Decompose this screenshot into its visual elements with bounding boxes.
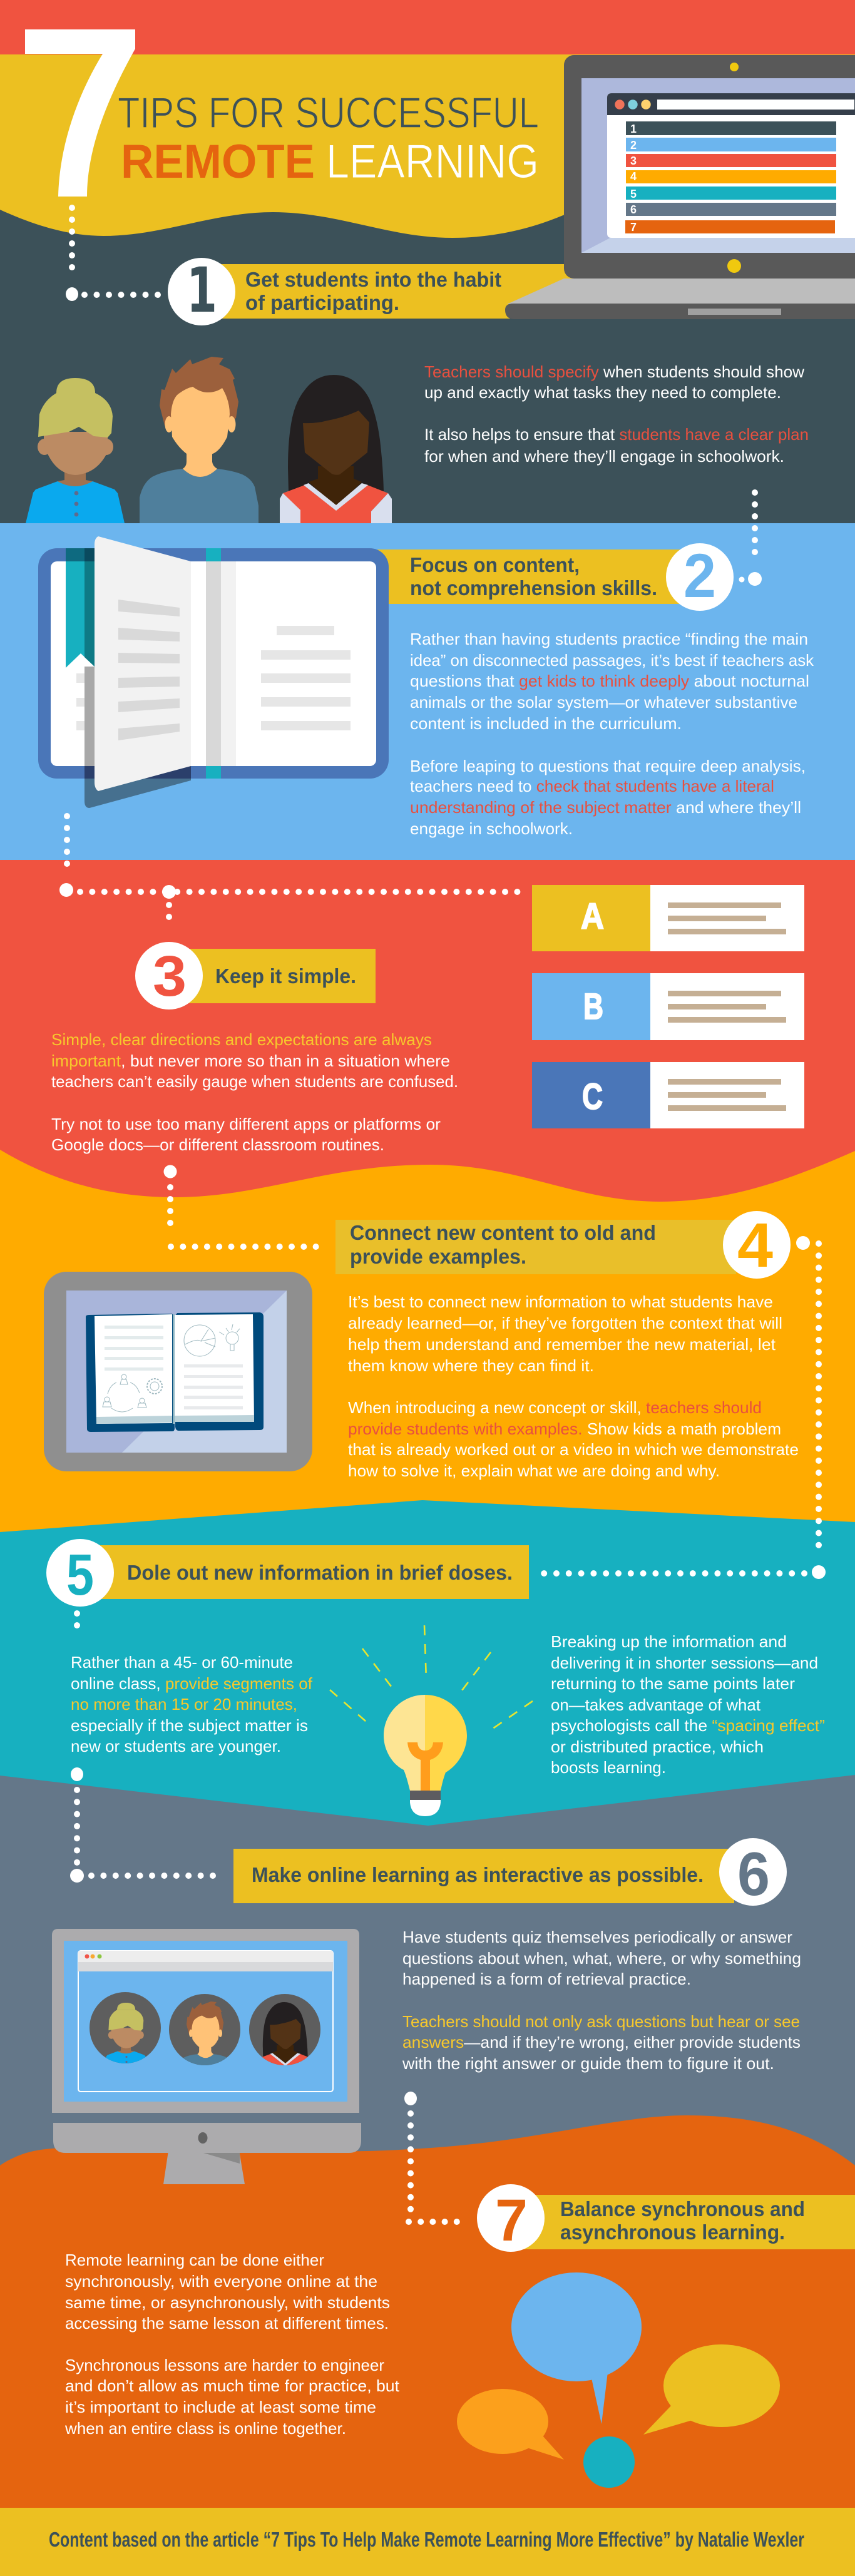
tip 2 body text: Rather than having students practice “finding the main [410,630,808,648]
tip 6 body text [402,1928,801,2073]
tip 1 body text: up and exactly what tasks they need to complete. [424,383,781,402]
avatar 1 [90,1992,161,2071]
tip 1 number badge: 1 [187,255,217,327]
icon: light bulb [330,1625,533,1816]
tip 4 body text: provide students with examples. Show kids a math problem [348,1419,781,1438]
tip 5 number badge [46,1539,114,1607]
tip 3 body text: important, but never more so than in a situation where [51,1051,450,1070]
tip 2 body text: content is included in the curriculum. [410,714,682,733]
tip 4 body text: It’s best to connect new information to what students have [348,1292,773,1311]
dotted connector: tip 3 to tip 4 [164,1165,327,1247]
tip 4 body text: how to solve it, explain what we are doing and why. [348,1461,720,1480]
tip 4 number badge: 4 [737,1210,773,1280]
tip 1 body text [424,362,809,466]
tip 7 body text: Synchronous lessons are harder to engineer [65,2356,384,2374]
tip 5 left body text: Rather than a 45- or 60-minute [71,1653,293,1672]
icon: laptop: 6 [630,203,637,216]
icon: open book [38,536,389,808]
tip 7 body text: Remote learning can be done either [65,2251,324,2269]
tip 6 body text: answers—and if they’re wrong, either provide students [402,2033,801,2052]
tip 5 right body text: returning to the same points later [551,1674,795,1693]
card C [532,1062,804,1128]
card C: C [582,1076,603,1117]
tip 7 heading: Balance synchronous and [560,2197,805,2221]
tip 6 body text: questions about when, what, where, or why something [402,1949,801,1968]
tip 7 body text: it’s important to include at least some time [65,2398,376,2416]
tip 7 body text: same time, or asynchronously, with students [65,2293,390,2312]
tip 4 number badge [723,1210,791,1280]
tip 7 heading: asynchronous learning. [560,2221,785,2244]
tip 5 number badge: 5 [66,1542,94,1607]
tip 6 body text: Have students quiz themselves periodically or answer [402,1928,792,1946]
browser window [78,1951,333,2092]
title: tips for successful: TIPS FOR SUCCESSFUL [118,88,539,137]
tip 6 number badge: 6 [737,1839,770,1908]
tip 2 heading [410,553,657,600]
tip 7 number badge: 7 [495,2187,528,2254]
tip 1 body text: for when and where they’ll engage in schoolwork. [424,447,784,466]
tip 6 body text: happened is a form of retrieval practice. [402,1970,691,1988]
tip 3 body text: teachers can’t easily gauge when students are confused. [51,1072,458,1091]
tip 2 heading: Focus on content, [410,553,580,576]
tip 2 heading: not comprehension skills. [410,576,657,600]
tip 1 body text: Teachers should specify when students should show [424,362,804,381]
tip 4 body text: help them understand and remember the new material, let [348,1335,776,1354]
orange bubble [457,2389,564,2460]
blue bubble [511,2272,642,2424]
tip 7 body text: and don’t allow as much time for practice, but [65,2376,400,2395]
student 1 [26,378,125,523]
card A [532,885,804,951]
dotted connector: tip 6 to tip 7 [404,2092,469,2222]
teal circle [583,2436,635,2488]
icon: laptop: 4 [630,170,637,183]
avatar 2 [169,1994,240,2080]
title: learning: LEARNING [326,135,539,188]
tip 6 banner [233,1849,734,1903]
tip 5 right body text: psychologists call the “spacing effect” [551,1716,825,1735]
dotted connector: tip 2 to tip 3 [59,816,522,929]
icon: laptop: 5 [630,188,637,200]
student 2 [140,357,259,523]
title: big seven [25,29,135,197]
yellow bubble [643,2344,780,2435]
dotted connector: tip 5 to tip 6 [70,1613,225,1883]
tip 3 heading: Keep it simple. [215,964,356,988]
tip 2 number badge [666,541,734,611]
tip 7 heading [560,2197,805,2244]
tip 3 body text: Google docs—or different classroom routines. [51,1135,384,1154]
tip 2 banner [376,549,689,604]
icon: laptop: 2 [630,139,637,151]
card B: B [583,986,603,1027]
tip 5 right body text: boosts learning. [551,1758,666,1777]
tip 7 banner [513,2195,855,2249]
tip 6 body text: Teachers should not only ask questions but hear or see [402,2012,800,2031]
tip 3 body text [51,1030,458,1154]
icon: laptop: 1 [630,123,637,135]
icon: laptop: 7 [630,221,637,233]
panel: multiple choice cards [532,885,804,1128]
title: remote: REMOTE [121,135,315,188]
tip 2 body text: engage in schoolwork. [410,819,573,838]
tip 1 number badge [168,255,235,327]
illustration: three students [26,357,392,523]
tip 5 left body text: especially if the subject matter is [71,1716,308,1735]
tip 4 body text [348,1292,799,1480]
tip 2 body text: animals or the solar system—or whatever substantive [410,693,797,712]
tip 2 body text: understanding of the subject matter and where they’ll [410,798,801,817]
tip 5 heading: Dole out new information in brief doses. [127,1561,513,1584]
tip 5 right body text: Breaking up the information and [551,1632,787,1651]
dotted connector: tip 1 to tip 2 [739,493,762,586]
tip 4 heading [350,1221,656,1268]
card B [532,973,804,1040]
tip 1 banner [213,264,601,319]
tip 1 body text: It also helps to ensure that students have a clear plan [424,425,809,444]
tip 4 body text: already learned—or, if they’ve forgotten the context that will [348,1314,782,1332]
tip 5 left body text: new or students are younger. [71,1737,281,1756]
tip 2 body text [410,630,814,838]
student 3 [280,375,392,523]
tip 5 left body text: no more than 15 or 20 minutes, [71,1695,297,1714]
tip 5 right body text: delivering it in shorter sessions—and [551,1653,818,1672]
icon: desktop monitor with video call [52,1929,361,2184]
tip 2 body text: Before leaping to questions that require deep analysis, [410,757,806,775]
tip 6 heading: Make online learning as interactive as possible. [252,1863,704,1886]
tip 1 heading [245,268,501,314]
icon: laptop: 3 [630,155,637,167]
tip 2 number badge: 2 [683,541,716,610]
tip 2 body text: questions that get kids to think deeply about nocturnal [410,672,809,690]
avatar 3 [249,1994,320,2072]
dotted connector: title to tip 1 [66,208,158,301]
tip 5 right body text [551,1632,825,1777]
tip 7 body text: synchronously, with everyone online at the [65,2272,377,2291]
tip 4 heading: provide examples. [350,1245,526,1268]
tip 5 banner [81,1545,529,1599]
tip 4 banner [335,1220,736,1274]
tip 7 number badge [477,2184,545,2254]
tip 3 body text: Simple, clear directions and expectations are always [51,1030,432,1049]
icon: tablet with open book [44,1272,312,1471]
tip 4 body text: that is already worked out or a video in which we demonstrate [348,1440,799,1459]
card A: A [581,896,604,937]
tip 7 body text: accessing the same lesson at different times. [65,2314,389,2333]
tip 3 body text: Try not to use too many different apps or platforms or [51,1115,441,1133]
tip 4 body text: When introducing a new concept or skill, teachers should [348,1398,762,1417]
tip 4 heading: Connect new content to old and [350,1221,656,1244]
icon: laptop [505,55,855,319]
tip 6 number badge [719,1838,787,1908]
tip 5 right body text: on—takes advantage of what [551,1695,761,1714]
tip 3 number badge: 3 [153,944,187,1008]
tip 3 banner [182,949,376,1003]
tip 4 body text: them know where they can find it. [348,1356,594,1375]
tip 3 number badge [135,942,203,1009]
tip 2 body text: idea” on disconnected passages, it’s best if teachers ask [410,651,814,670]
tip 5 right body text: or distributed practice, which [551,1737,764,1756]
dotted connector: tip 4 to tip 5 [537,1236,826,1579]
tip 2 body text: teachers need to check that students have a literal [410,777,774,795]
tip 6 body text: with the right answer or guide them to figure it out. [402,2054,774,2073]
tip 7 body text: when an entire class is online together. [64,2419,346,2438]
tip 7 body text [64,2251,400,2438]
tip 5 left body text: online class, provide segments of [71,1674,313,1693]
tip 1 heading: Get students into the habit [245,268,501,291]
tip 5 left body text [71,1653,313,1756]
icon: speech bubbles [457,2272,780,2488]
tip 1 heading: of participating. [245,291,399,314]
